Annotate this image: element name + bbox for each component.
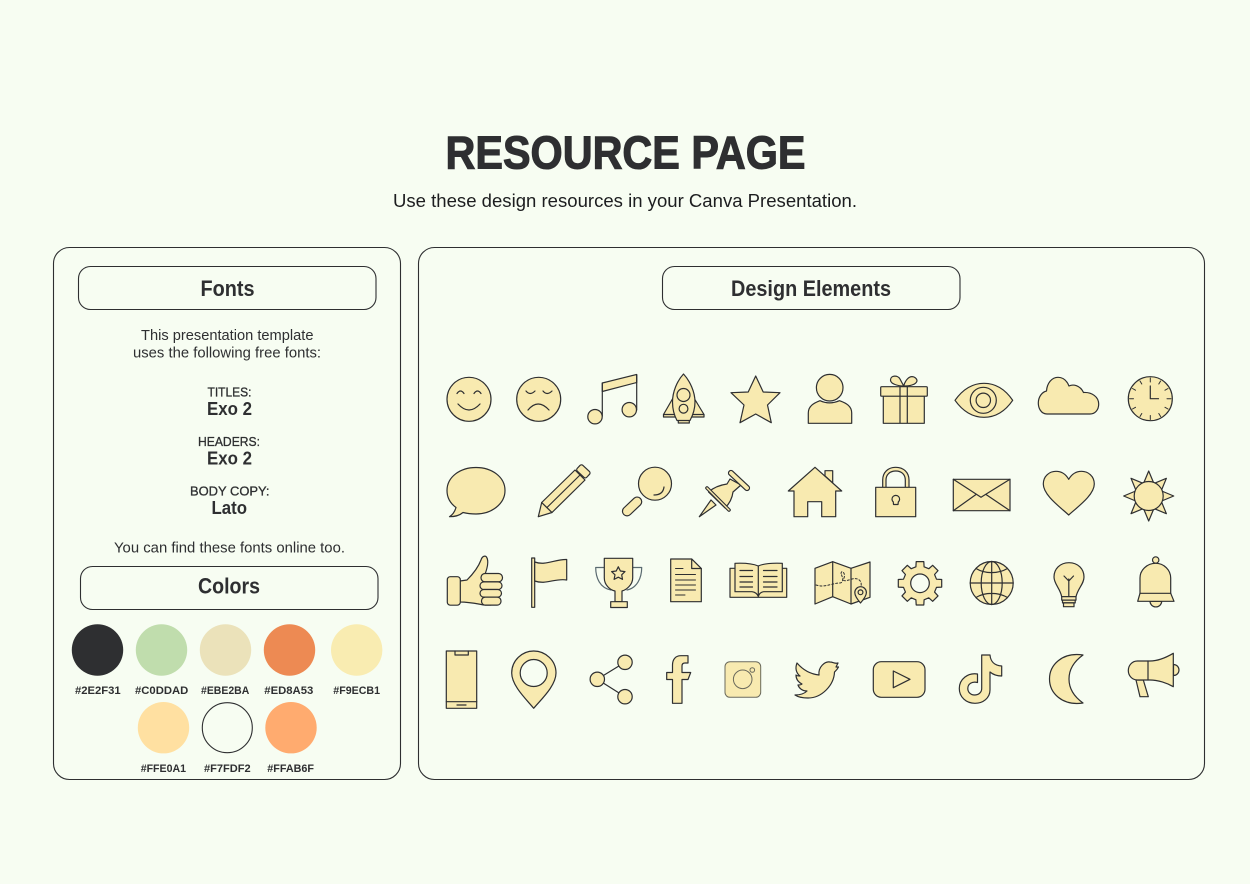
swatch: F9ECB1: [331, 624, 382, 697]
text block: font intro: [133, 328, 321, 362]
icon: cloud: [1038, 377, 1099, 414]
heading: design elements: [662, 266, 960, 310]
swatch: 2E2F31: #2E2F31: [75, 685, 121, 697]
text block: titles font: TITLES:: [208, 385, 252, 400]
swatch: ED8A53: [264, 624, 315, 697]
icon: open book: [730, 563, 787, 597]
icon: rocket: [664, 374, 704, 423]
text block: body copy font: [190, 484, 270, 518]
swatch: C0DDAD: [135, 624, 188, 697]
swatch: EBE2BA: #EBE2BA: [201, 685, 249, 697]
icon: star: [731, 376, 780, 423]
panel: design elements: [418, 248, 1204, 780]
icon: trophy: [596, 558, 642, 608]
icon: pencil: [538, 464, 591, 517]
icon: clock: [1128, 377, 1172, 421]
swatch: FFE0A1: #FFE0A1: [141, 763, 186, 775]
swatch: FFAB6F: #FFAB6F: [267, 763, 314, 775]
icon: globe: [970, 562, 1013, 604]
text block: titles font: Exo 2: [207, 399, 252, 419]
icon: thumbs up: [447, 556, 502, 605]
icon: music notes: [588, 374, 637, 424]
heading: design elements: Design Elements: [731, 276, 891, 301]
icon: share: [590, 655, 632, 704]
swatch: FFAB6F: [265, 702, 317, 775]
title: RESOURCE PAGE: [446, 126, 806, 178]
swatch: FFE0A1: [138, 702, 189, 775]
subtitle: Use these design resources in your Canva Presentation.: [393, 190, 857, 211]
swatch: F7FDF2: [202, 703, 252, 775]
text block: fonts note: You can find these fonts online too.: [114, 541, 345, 557]
icon: speech bubble: [447, 468, 505, 517]
heading: colors: Colors: [198, 574, 260, 598]
icon: megaphone: [1128, 653, 1179, 697]
icon: magnifying glass: [622, 467, 672, 516]
icon: light bulb: [1054, 563, 1084, 607]
text block: titles font: [207, 385, 252, 419]
text block: headers font: Exo 2: [207, 448, 252, 468]
swatch: F7FDF2: #F7FDF2: [204, 763, 251, 775]
icon: push pin: [699, 473, 747, 517]
swatch: C0DDAD: #C0DDAD: [135, 685, 188, 697]
heading: fonts: [78, 266, 376, 310]
text block: body copy font: Lato: [212, 498, 247, 518]
icon: instagram: [725, 662, 761, 697]
swatch: 2E2F31: [72, 624, 123, 697]
icon: padlock: [876, 467, 916, 517]
heading: fonts: Fonts: [200, 276, 254, 301]
heading: colors: [80, 566, 378, 610]
text block: font intro: uses the following free fonts:: [133, 346, 321, 362]
icon: sun: [1124, 471, 1174, 521]
icon: gear: [898, 562, 942, 605]
text block: headers font: HEADERS:: [198, 434, 260, 449]
text block: headers font: [198, 434, 260, 468]
icon: heart: [1043, 471, 1094, 515]
swatch: ED8A53: #ED8A53: [264, 685, 313, 697]
icon: video play: [873, 662, 925, 697]
icon: smartphone: [446, 651, 477, 708]
panel: fonts and colors: [54, 248, 400, 780]
text block: body copy font: BODY COPY:: [190, 484, 270, 499]
icon: sad face: [517, 377, 561, 421]
icon: bell: [1138, 557, 1174, 607]
icon: folded map: [815, 562, 870, 604]
icon: crescent moon: [1050, 655, 1083, 703]
icon: location pin: [512, 651, 556, 708]
text block: font intro: This presentation template: [141, 328, 314, 344]
icon: house: [788, 467, 842, 517]
swatch: F9ECB1: #F9ECB1: [333, 685, 380, 697]
icon: envelope: [953, 479, 1010, 511]
icon: smiley face: [447, 377, 491, 421]
icon: document: [671, 559, 701, 602]
icon: tiktok: [959, 655, 1002, 703]
icon: flag: [532, 558, 567, 607]
swatch: EBE2BA: [200, 624, 251, 697]
icon: eye: [955, 383, 1013, 417]
icon: twitter bird: [795, 662, 838, 698]
icon: gift box: [881, 376, 927, 423]
icon: facebook: [667, 656, 691, 703]
icon: person: [808, 374, 852, 423]
